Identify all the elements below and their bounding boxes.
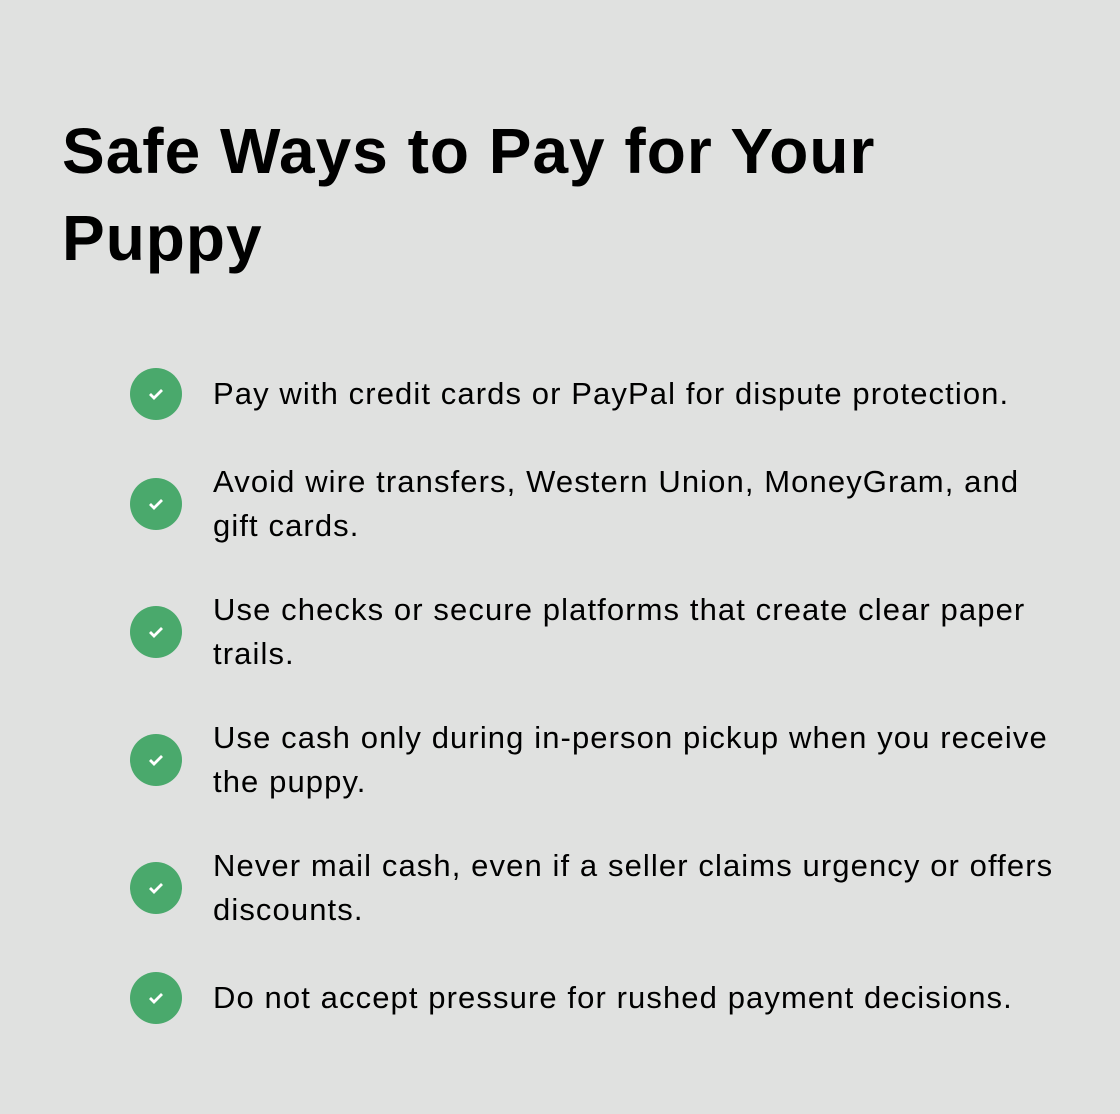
item 6: Do not accept pressure for rushed payment decisions. (213, 980, 1013, 1015)
item 1 (130, 368, 1009, 420)
title: Puppy (62, 202, 263, 274)
item 6 (130, 972, 1013, 1024)
item 3: Use checks or secure platforms that create clear paper (213, 592, 1025, 627)
item 2 (130, 464, 1019, 543)
item 4 (130, 720, 1048, 799)
title: Safe Ways to Pay for Your (62, 115, 875, 187)
item 5: discounts. (213, 892, 364, 927)
item 2: gift cards. (213, 508, 359, 543)
item 4: Use cash only during in-person pickup when you receive (213, 720, 1048, 755)
title (62, 115, 875, 274)
item 2: Avoid wire transfers, Western Union, MoneyGram, and (213, 464, 1019, 499)
item 5 (130, 848, 1053, 927)
item 4: the puppy. (213, 764, 366, 799)
item 3 (130, 592, 1025, 671)
item 1: Pay with credit cards or PayPal for dispute protection. (213, 376, 1009, 411)
item 5: Never mail cash, even if a seller claims urgency or offers (213, 848, 1053, 883)
item 3: trails. (213, 636, 295, 671)
